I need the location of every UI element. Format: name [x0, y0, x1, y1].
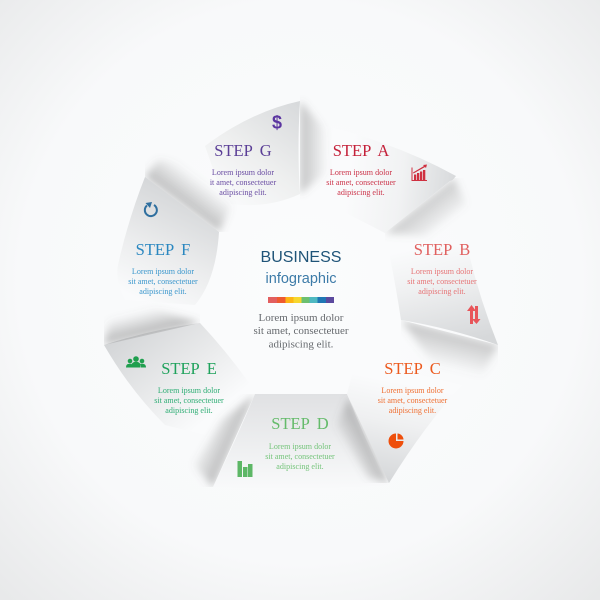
shadow: step E	[104, 308, 200, 345]
heading: step E: STEP E	[161, 359, 217, 378]
text: step D: Lorem ipsum dolor	[269, 442, 331, 451]
heading: step D: STEP D	[271, 414, 329, 433]
icon: pie chart	[389, 434, 404, 449]
panel: step D	[196, 394, 370, 487]
heading: step A: STEP A	[333, 141, 389, 160]
icon: bar chart	[238, 461, 252, 477]
panel: step E	[104, 310, 234, 420]
shadow: step G	[300, 101, 326, 194]
text: step B: Lorem ipsum dolor	[411, 267, 473, 276]
icon: up and down arrows	[467, 305, 480, 324]
sheet: step F	[117, 177, 219, 305]
text: step G: adipiscing elit.	[219, 188, 267, 197]
text: step A: adipiscing elit.	[337, 188, 385, 197]
shadow: step B	[402, 320, 498, 370]
sheet: step C	[347, 360, 462, 483]
icon: refresh	[145, 202, 157, 216]
heading: step F: STEP F	[136, 240, 190, 259]
text: step G: Lorem ipsum dolor	[212, 168, 274, 177]
shadow: step A	[385, 178, 466, 236]
sheet: step D	[213, 394, 388, 489]
text: step D: adipiscing elit.	[276, 462, 324, 471]
title: BUSINESS	[261, 249, 341, 266]
text: step C: sit amet, consectetuer	[378, 396, 448, 405]
icon: people	[126, 356, 146, 368]
text: step A: sit amet, consectetuer	[326, 178, 396, 187]
icon: dollar: $	[272, 112, 282, 132]
panel: step B	[396, 244, 498, 370]
panel: step F	[117, 177, 219, 305]
text: step C: Lorem ipsum dolor	[381, 386, 444, 395]
text: step A: Lorem ipsum dolor	[330, 168, 392, 177]
text: step E: Lorem ipsum dolor	[158, 386, 220, 395]
sheet: step B	[385, 233, 498, 345]
text: step C: adipiscing elit.	[389, 406, 436, 415]
text: step B: sit amet, consectetuer	[407, 277, 477, 286]
text: step B: adipiscing elit.	[418, 287, 466, 296]
center block	[254, 249, 349, 350]
panel: step C	[337, 363, 448, 483]
sheet: step E	[104, 323, 257, 435]
shadow: step D	[194, 394, 255, 487]
shadow: step F	[145, 160, 232, 232]
rainbow bar	[268, 297, 334, 303]
icon: growth chart	[412, 164, 427, 181]
panel: step G	[205, 101, 326, 205]
shadow: step C	[336, 398, 389, 483]
text: step G: it amet, consectetuer	[210, 178, 276, 187]
text: step D: sit amet, consectetuer	[265, 452, 335, 461]
center text: adipiscing elit.	[269, 338, 334, 350]
sheet: step G	[205, 101, 300, 205]
center text: sit amet, consectetuer	[254, 325, 349, 337]
center text: Lorem ipsum dolor	[259, 312, 344, 324]
text: step F: sit amet, consectetuer	[128, 277, 198, 286]
subtitle: infographic	[266, 271, 336, 287]
text: step F: adipiscing elit.	[139, 287, 187, 296]
text: step E: sit amet, consectetuer	[154, 396, 224, 405]
heading: step C: STEP C	[384, 359, 441, 378]
text: step E: adipiscing elit.	[165, 406, 213, 415]
heading: step B: STEP B	[414, 240, 470, 259]
text: step F: Lorem ipsum dolor	[132, 267, 194, 276]
sheet: step A	[320, 128, 456, 233]
heading: step G: STEP G	[214, 141, 272, 160]
panel: step A	[326, 145, 464, 237]
